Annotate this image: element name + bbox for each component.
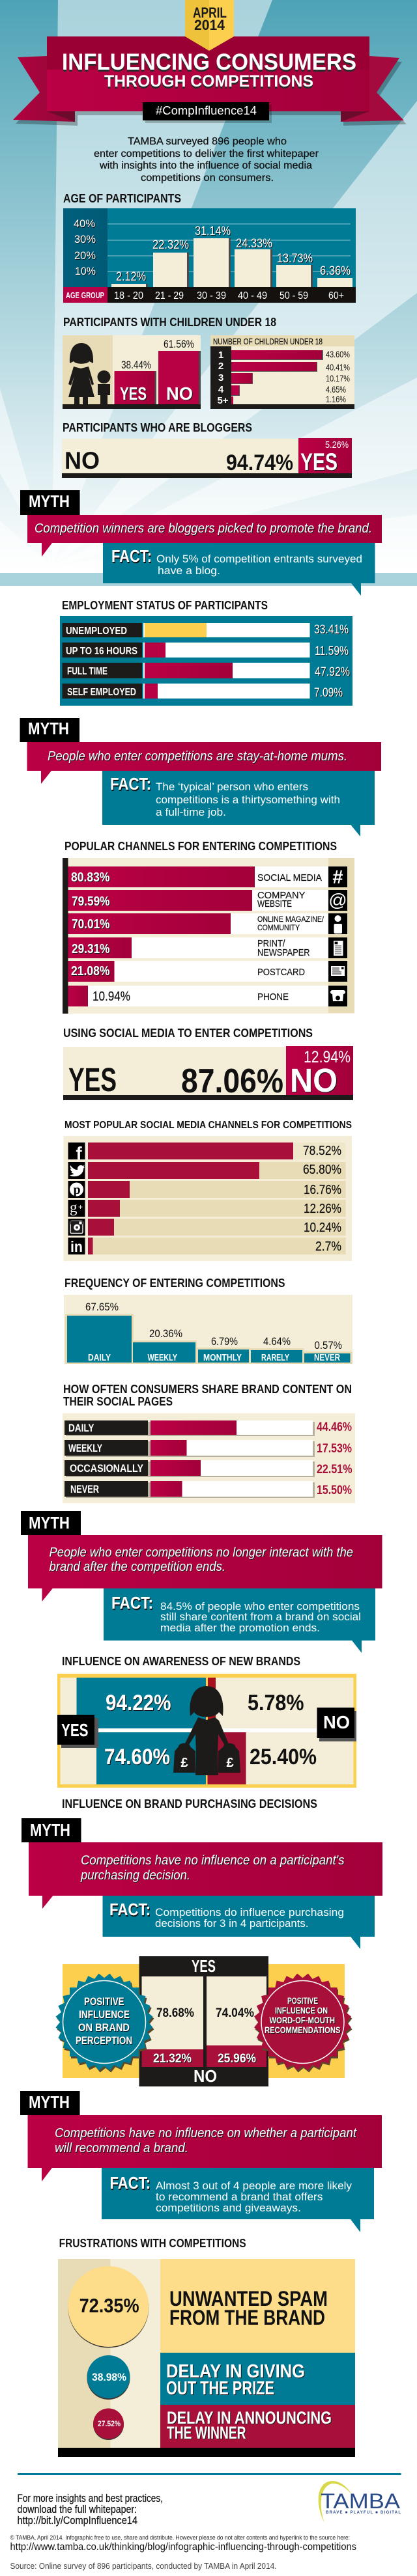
row: company website bbox=[68, 890, 347, 911]
myth label bbox=[20, 718, 79, 742]
values: 94.22% bbox=[106, 1691, 171, 1715]
fact callout: media after the promotion ends. bbox=[160, 1622, 320, 1634]
title: INFLUENCING CONSUMERS bbox=[62, 49, 356, 75]
age group labels: 30 - 39 bbox=[197, 290, 226, 301]
row: social media bbox=[68, 866, 347, 888]
no tag: NO bbox=[323, 1712, 350, 1732]
logo: TAMBA bbox=[319, 2481, 401, 2523]
fact callout: FACT: bbox=[110, 774, 151, 794]
bar: daily bbox=[65, 1301, 134, 1364]
myth label bbox=[20, 490, 79, 515]
fact callout bbox=[103, 543, 375, 596]
panel: popular channels bbox=[63, 858, 354, 1014]
myth and fact 4 bbox=[22, 1818, 382, 1949]
row: online magazine: ONLINE MAGAZINE/ bbox=[257, 915, 324, 924]
row: company website: @ bbox=[328, 890, 347, 910]
row: instagram bbox=[68, 1219, 345, 1236]
row: unwanted spam bbox=[68, 2259, 355, 2353]
values bbox=[104, 1691, 317, 1769]
logo: TAMBA: BRAVE ■ PLAYFUL ■ DIGITAL bbox=[326, 2511, 401, 2515]
whitepaper call to action: download the full whitepaper: bbox=[17, 2504, 137, 2515]
row: postcard: POSTCARD bbox=[257, 967, 305, 978]
row: occasionally bbox=[65, 1460, 352, 1477]
header ribbon banner bbox=[13, 36, 407, 126]
bar: yes: 38.44% bbox=[121, 359, 151, 371]
fact callout: 84.5% of people who enter competitions bbox=[160, 1600, 360, 1613]
badge: brand perception: INFLUENCE bbox=[79, 2008, 130, 2021]
row: linkedin: in bbox=[70, 1238, 83, 1255]
myth callout: brand after the competition ends. bbox=[50, 1560, 225, 1574]
panel: employment bbox=[60, 616, 352, 706]
values: 4.65% bbox=[326, 384, 346, 395]
date tab: 2014 bbox=[194, 17, 225, 33]
yes no columns: 25.96% bbox=[218, 2052, 256, 2066]
chart: using social media bbox=[63, 1046, 353, 1100]
row: unwanted spam: UNWANTED SPAM bbox=[169, 2287, 328, 2310]
row labels bbox=[217, 350, 229, 406]
badge: word of mouth: POSITIVE bbox=[287, 1995, 318, 2006]
age group labels: AGE GROUP bbox=[66, 290, 104, 300]
fact callout bbox=[103, 1896, 375, 1949]
row: never: 15.50% bbox=[317, 1484, 352, 1497]
fact callout: FACT: bbox=[111, 1593, 153, 1613]
row: linkedin: 2.7% bbox=[315, 1240, 341, 1254]
row: delay in giving prize: OUT THE PRIZE bbox=[166, 2378, 274, 2399]
values: 74.60% bbox=[104, 1745, 170, 1769]
heading: how often consumers share bbox=[63, 1382, 352, 1408]
values: 10.17% bbox=[326, 373, 350, 383]
yes no columns: 74.04% bbox=[216, 2006, 254, 2020]
myth label: MYTH bbox=[30, 1820, 70, 1840]
bar values: 13.73% bbox=[277, 252, 313, 266]
myth and fact 5 bbox=[20, 2091, 382, 2232]
myth label: MYTH bbox=[29, 2092, 70, 2112]
row labels: 4 bbox=[218, 384, 224, 395]
values bbox=[326, 349, 350, 404]
chart: bloggers: NO bbox=[65, 447, 100, 474]
bar: weekly bbox=[132, 1327, 197, 1364]
copyright and source: http://www.tamba.co.uk/thinking/blog/infographic-influencing-through-competitions bbox=[10, 2541, 356, 2553]
row: company website: COMPANY bbox=[257, 890, 305, 901]
row: google plus: g bbox=[70, 1199, 78, 1215]
fact callout: competitions and giveaways. bbox=[156, 2202, 301, 2214]
row: phone bbox=[68, 986, 347, 1006]
fact callout: Almost 3 out of 4 people are more likely bbox=[156, 2180, 352, 2192]
row: up to 16 hours bbox=[63, 643, 349, 658]
myth label bbox=[21, 1511, 81, 1535]
row: unemployed: 33.41% bbox=[314, 623, 349, 637]
row: full time bbox=[63, 663, 350, 679]
bar: rarely: 4.64% bbox=[263, 1335, 291, 1348]
fact callout: have a blog. bbox=[158, 564, 220, 577]
values: 25.40% bbox=[250, 1745, 317, 1769]
row: self employed: 7.09% bbox=[314, 686, 343, 700]
bars bbox=[231, 350, 323, 404]
row: daily bbox=[65, 1420, 352, 1436]
myth callout: People who enter competitions no longer interact with the bbox=[50, 1545, 353, 1560]
intro text: enter competitions to deliver the first whitepaper bbox=[94, 148, 319, 159]
hashtag box: #CompInfluence14 bbox=[156, 104, 257, 117]
myth label: MYTH bbox=[29, 492, 70, 511]
myth label bbox=[20, 2091, 79, 2115]
myth callout bbox=[27, 515, 382, 557]
myth callout: People who enter competitions are stay-at-home mums. bbox=[48, 749, 347, 764]
row: print newspaper: PRINT/ bbox=[257, 938, 285, 949]
row: twitter bbox=[68, 1162, 345, 1179]
hashtag box bbox=[143, 102, 272, 123]
yes no columns: NO bbox=[194, 2066, 217, 2086]
badge: brand perception: ON BRAND bbox=[78, 2021, 130, 2034]
row: company website: 79.59% bbox=[72, 894, 110, 909]
chart: using social media: NO bbox=[290, 1062, 338, 1099]
fact callout: competitions is a thirtysomething with bbox=[156, 794, 340, 806]
chart: using social media: 12.94% bbox=[304, 1048, 351, 1066]
chart: bloggers: 5.26% bbox=[325, 439, 349, 450]
intro text: competitions on consumers. bbox=[141, 173, 274, 184]
intro text bbox=[94, 136, 319, 184]
row: delay in giving prize bbox=[87, 2353, 355, 2405]
bar: weekly: WEEKLY bbox=[147, 1352, 177, 1363]
fact callout: Competitions do influence purchasing bbox=[155, 1906, 344, 1918]
row: full time: 47.92% bbox=[315, 665, 350, 679]
row: unwanted spam: FROM THE BRAND bbox=[169, 2306, 325, 2329]
bar: no bbox=[158, 338, 201, 404]
row labels: 5+ bbox=[217, 395, 229, 406]
row: linkedin bbox=[68, 1238, 345, 1255]
row: never: NEVER bbox=[70, 1483, 99, 1495]
copyright and source bbox=[10, 2534, 356, 2571]
heading: popular channels: POPULAR CHANNELS FOR ENTERING COMPETITIONS bbox=[65, 839, 337, 853]
heading: how often consumers share: HOW OFTEN CONSUMERS SHARE BRAND CONTENT ON bbox=[63, 1382, 352, 1396]
myth label: MYTH bbox=[28, 719, 69, 738]
copyright and source: © TAMBA, April 2014. Infographic free to use, share and distribute. However please do not alter contents and hyperlink to the source here: bbox=[10, 2534, 350, 2541]
myth callout bbox=[29, 1842, 382, 1909]
row: never bbox=[65, 1481, 352, 1498]
yes tag: YES bbox=[61, 1720, 89, 1740]
row: company website: WEBSITE bbox=[257, 898, 292, 909]
row: print newspaper bbox=[68, 937, 347, 958]
bar: no: 61.56% bbox=[164, 338, 194, 350]
fact callout: FACT: bbox=[111, 546, 152, 566]
row: delay in giving prize: 38.98% bbox=[92, 2371, 126, 2383]
row: phone: PHONE bbox=[257, 991, 289, 1003]
no tag bbox=[317, 1708, 356, 1741]
chart: frequency bbox=[64, 1295, 352, 1364]
panel: frustrations bbox=[58, 2259, 355, 2457]
heading: employment: EMPLOYMENT STATUS OF PARTICIPANTS bbox=[62, 598, 268, 612]
chart: age of participants bbox=[63, 208, 356, 303]
chart: using social media: 87.06% bbox=[181, 1062, 283, 1100]
myth callout bbox=[28, 1535, 382, 1601]
panel: number of children bbox=[210, 335, 354, 409]
fact callout: to recommend a brand that offers bbox=[156, 2191, 323, 2203]
heading: bloggers: PARTICIPANTS WHO ARE BLOGGERS bbox=[63, 421, 252, 434]
row: social media: 80.83% bbox=[71, 870, 110, 885]
heading: using social media: USING SOCIAL MEDIA TO ENTER COMPETITIONS bbox=[63, 1026, 313, 1040]
myth and fact 2 bbox=[20, 718, 381, 837]
bar values: 31.14% bbox=[195, 225, 231, 238]
icon: figure with money bags: £ bbox=[180, 1756, 188, 1770]
yes no columns: 78.68% bbox=[156, 2006, 194, 2020]
badge: word of mouth: INFLUENCE ON bbox=[275, 2005, 328, 2015]
yes no columns: 21.32% bbox=[153, 2052, 192, 2066]
myth label: MYTH bbox=[29, 1513, 70, 1532]
row labels: 2 bbox=[218, 361, 223, 372]
badge: word of mouth: RECOMMENDATIONS bbox=[265, 2025, 340, 2035]
bar: daily: DAILY bbox=[88, 1352, 111, 1363]
bar: never: 0.57% bbox=[314, 1339, 342, 1351]
row: self employed bbox=[63, 684, 343, 700]
bar: never: NEVER bbox=[314, 1352, 340, 1363]
chart: bloggers: YES bbox=[300, 449, 338, 475]
background sunburst bbox=[0, 0, 417, 586]
row: daily: DAILY bbox=[68, 1422, 94, 1434]
row: delay in giving prize: DELAY IN GIVING bbox=[166, 2361, 305, 2382]
age group labels: 18 - 20 bbox=[114, 290, 143, 301]
row: up to 16 hours: 11.59% bbox=[315, 644, 349, 658]
chart: using social media: YES bbox=[68, 1061, 117, 1098]
row: postcard bbox=[68, 961, 347, 982]
row: pinterest: p bbox=[73, 1183, 81, 1197]
badge: brand perception: POSITIVE bbox=[84, 1995, 124, 2008]
row: unwanted spam: 72.35% bbox=[79, 2294, 139, 2317]
bar: yes bbox=[115, 359, 156, 404]
age group labels: 40 - 49 bbox=[238, 290, 267, 301]
row: unemployed: UNEMPLOYED bbox=[66, 626, 127, 637]
row labels: 1 bbox=[218, 350, 223, 361]
row: weekly: 17.53% bbox=[317, 1442, 352, 1456]
badge: word of mouth: WORD-OF-MOUTH bbox=[270, 2015, 335, 2025]
row: print newspaper: NEWSPAPER bbox=[257, 947, 310, 958]
row: self employed: SELF EMPLOYED bbox=[67, 687, 136, 698]
row: print newspaper: 29.31% bbox=[72, 942, 110, 956]
row: google plus: 12.26% bbox=[304, 1202, 341, 1216]
yes tag bbox=[57, 1715, 98, 1748]
bar: daily: 67.65% bbox=[85, 1301, 119, 1313]
row: weekly bbox=[65, 1440, 352, 1457]
copyright and source: Source: Online survey of 896 participants, conducted by TAMBA in April 2014. bbox=[10, 2561, 276, 2571]
date tab: APRIL bbox=[193, 5, 227, 21]
bar: never bbox=[303, 1339, 352, 1364]
chart: bloggers bbox=[62, 438, 352, 478]
bar values: 24.33% bbox=[236, 237, 272, 251]
axis labels bbox=[74, 217, 96, 277]
row: online magazine: COMMUNITY bbox=[257, 923, 300, 932]
bar: monthly: MONTHLY bbox=[203, 1352, 242, 1363]
row: delay in announcing winner: DELAY IN ANNOUNCING bbox=[167, 2408, 332, 2428]
heading: how often consumers share: THEIR SOCIAL PAGES bbox=[63, 1394, 173, 1408]
axis labels: 40% bbox=[74, 217, 95, 230]
heading: participants with children: PARTICIPANTS WITH CHILDREN UNDER 18 bbox=[63, 315, 276, 329]
age group labels: 60+ bbox=[328, 290, 344, 301]
myth and fact 3 bbox=[21, 1511, 382, 1653]
whitepaper call to action: http://bit.ly/CompInfluence14 bbox=[17, 2515, 137, 2527]
row: weekly: WEEKLY bbox=[68, 1442, 102, 1454]
values: 1.16% bbox=[326, 394, 346, 404]
row: pinterest: 16.76% bbox=[304, 1183, 341, 1197]
panel: awareness of new brands bbox=[57, 1674, 356, 1788]
row: online magazine bbox=[68, 913, 347, 934]
yes no columns bbox=[142, 1956, 266, 2086]
whitepaper call to action bbox=[17, 2493, 163, 2527]
heading: frequency: FREQUENCY OF ENTERING COMPETITIONS bbox=[65, 1276, 285, 1290]
row: facebook bbox=[68, 1143, 345, 1163]
row: twitter: 65.80% bbox=[303, 1163, 341, 1177]
heading: awareness of new brands: INFLUENCE ON AWARENESS OF NEW BRANDS bbox=[62, 1654, 300, 1668]
row: social media: # bbox=[332, 867, 343, 888]
row: occasionally: 22.51% bbox=[317, 1463, 352, 1476]
fact callout: decisions for 3 in 4 participants. bbox=[155, 1917, 309, 1930]
row: phone: 10.94% bbox=[93, 990, 130, 1004]
heading: age of participants: AGE OF PARTICIPANTS bbox=[63, 191, 181, 205]
bar values: 6.36% bbox=[320, 264, 351, 278]
myth label bbox=[22, 1818, 81, 1842]
icon: figure with money bags: £ bbox=[226, 1756, 234, 1770]
fact callout: a full-time job. bbox=[156, 806, 226, 818]
badge: brand perception: PERCEPTION bbox=[76, 2034, 132, 2047]
myth callout bbox=[27, 2115, 382, 2181]
fact callout: The ‘typical’ person who enters bbox=[156, 781, 308, 793]
fact callout bbox=[102, 771, 375, 837]
intro text: with insights into the influence of social media bbox=[99, 160, 312, 171]
bar: monthly bbox=[197, 1335, 250, 1364]
myth and fact 1 bbox=[20, 490, 382, 596]
fact callout bbox=[102, 2168, 374, 2232]
row: social media: SOCIAL MEDIA bbox=[257, 872, 322, 883]
myth callout bbox=[27, 742, 381, 784]
icon: figure with money bags bbox=[173, 1686, 240, 1775]
myth callout: will recommend a brand. bbox=[55, 2141, 188, 2155]
intro text: TAMBA surveyed 896 people who bbox=[128, 136, 287, 147]
bar: rarely bbox=[250, 1335, 304, 1364]
icon: mother and child bbox=[68, 343, 111, 404]
logo: TAMBA: TAMBA bbox=[321, 2489, 401, 2513]
bar: monthly: 6.79% bbox=[211, 1335, 238, 1348]
panel: number of children: NUMBER OF CHILDREN UNDER 18 bbox=[213, 337, 323, 346]
yes no columns: YES bbox=[192, 1956, 216, 1976]
row: instagram: 10.24% bbox=[304, 1221, 341, 1235]
values: 5.78% bbox=[248, 1691, 304, 1715]
footer rule bbox=[18, 2473, 401, 2475]
values: 43.60% bbox=[326, 349, 350, 359]
bars bbox=[111, 238, 352, 287]
row: occasionally: OCCASIONALLY bbox=[70, 1462, 144, 1475]
row: google plus bbox=[68, 1199, 345, 1217]
fact callout: FACT: bbox=[109, 1900, 151, 1919]
row: postcard: 21.08% bbox=[71, 964, 110, 978]
whitepaper call to action: For more insights and best practices, bbox=[17, 2493, 163, 2504]
fact callout: Only 5% of competition entrants surveyed bbox=[156, 553, 362, 565]
bar: no: NO bbox=[166, 383, 193, 404]
title bbox=[62, 49, 356, 90]
bar: rarely: RARELY bbox=[261, 1352, 289, 1363]
row labels: 3 bbox=[218, 372, 223, 383]
axis labels: 30% bbox=[74, 233, 96, 245]
chart: brand perception and word of mouth bbox=[56, 1956, 352, 2086]
row: pinterest bbox=[68, 1181, 345, 1198]
panel: how often share bbox=[63, 1413, 355, 1503]
fact callout: still share content from a brand on social bbox=[160, 1611, 361, 1623]
row: online magazine: 70.01% bbox=[72, 917, 110, 932]
date tab bbox=[185, 0, 234, 51]
row: delay in announcing winner: THE WINNER bbox=[167, 2423, 246, 2443]
axis labels: 10% bbox=[75, 265, 96, 277]
row: delay in announcing winner bbox=[93, 2405, 355, 2448]
bar values bbox=[116, 225, 351, 284]
age group labels: 50 - 59 bbox=[280, 290, 308, 301]
fact callout: FACT: bbox=[109, 2173, 151, 2193]
myth callout: Competition winners are bloggers picked to promote the brand. bbox=[35, 521, 372, 536]
title: THROUGH COMPETITIONS bbox=[104, 72, 313, 90]
row: daily: 44.46% bbox=[317, 1420, 352, 1434]
myth callout: Competitions have no influence on whether a participant bbox=[55, 2126, 357, 2140]
axis labels: 20% bbox=[74, 249, 96, 262]
bar: weekly: 20.36% bbox=[149, 1327, 182, 1340]
myth callout: purchasing decision. bbox=[80, 1868, 190, 1883]
bar values: 2.12% bbox=[116, 270, 146, 284]
age group labels: 21 - 29 bbox=[155, 290, 184, 301]
row: unemployed bbox=[63, 623, 349, 637]
bar values: 22.32% bbox=[152, 238, 189, 252]
panel: social channels bbox=[64, 1136, 352, 1261]
row: delay in announcing winner: 27.52% bbox=[98, 2419, 121, 2428]
myth callout: Competitions have no influence on a participant's bbox=[81, 1853, 344, 1868]
badge: brand perception bbox=[56, 1974, 154, 2072]
heading: most popular social channels: MOST POPULAR SOCIAL MEDIA CHANNELS FOR COMPETITIONS bbox=[65, 1120, 352, 1131]
row: facebook: f bbox=[76, 1143, 82, 1163]
row: up to 16 hours: UP TO 16 HOURS bbox=[66, 646, 137, 657]
badge: word of mouth bbox=[254, 1974, 352, 2072]
bar: yes: YES bbox=[120, 383, 147, 404]
values: 40.41% bbox=[326, 362, 350, 372]
row: facebook: 78.52% bbox=[303, 1144, 341, 1158]
row: full time: FULL TIME bbox=[67, 666, 108, 677]
fact callout bbox=[104, 1588, 375, 1653]
heading: frustrations: FRUSTRATIONS WITH COMPETITIONS bbox=[59, 2236, 246, 2250]
row: google plus: + bbox=[78, 1202, 83, 1212]
heading: purchasing decisions: INFLUENCE ON BRAND PURCHASING DECISIONS bbox=[62, 1797, 317, 1810]
panel: children yes no bbox=[63, 335, 201, 409]
age group labels bbox=[66, 290, 344, 301]
chart: bloggers: 94.74% bbox=[226, 450, 293, 475]
